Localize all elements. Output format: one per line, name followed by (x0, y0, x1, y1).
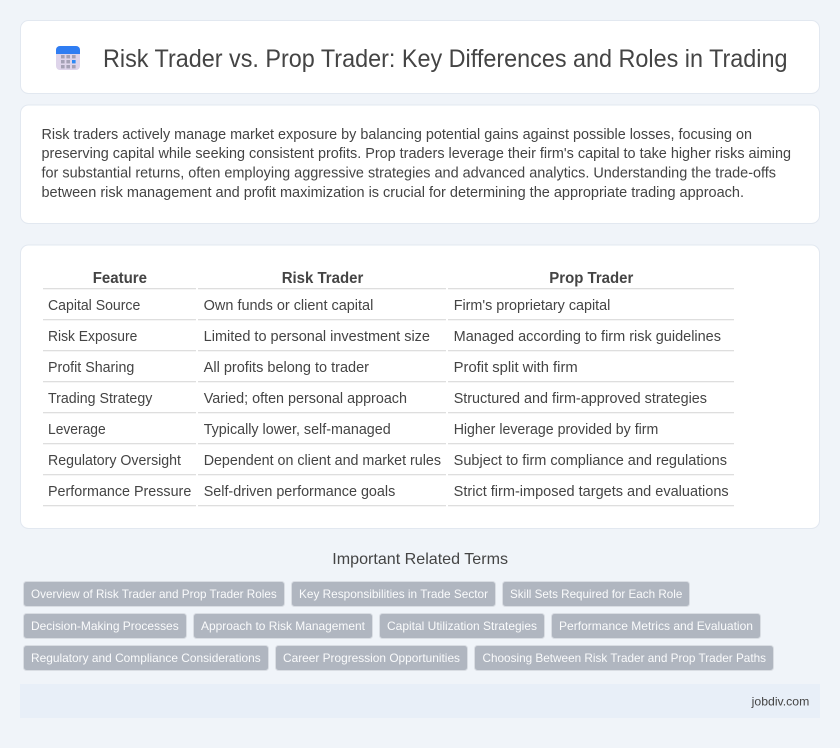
intro paragraph: preserving capital while seeking consistent profits. Prop traders leverage their firm's capital to take higher risks aiming (42, 146, 791, 162)
footer source link: jobdiv.com (751, 694, 809, 708)
table header row (43, 270, 734, 289)
related terms tags (24, 582, 774, 670)
row: profit sharing: Profit split with firm (454, 360, 578, 376)
row: risk exposure (43, 329, 734, 351)
row: capital source (43, 298, 734, 320)
panel: header (20, 20, 820, 94)
panel: introduction (20, 105, 820, 224)
tag (292, 582, 496, 606)
row: capital source: Firm's proprietary capital (454, 298, 610, 314)
row: profit sharing: Profit Sharing (48, 360, 134, 376)
row: regulatory oversight: Subject to firm compliance and regulations (454, 453, 727, 469)
table header row: Risk Trader (282, 270, 363, 287)
intro paragraph: Risk traders actively manage market exposure by balancing potential gains against possible losses, focusing on (42, 127, 752, 143)
row: risk exposure: Managed according to firm risk guidelines (454, 329, 721, 345)
intro paragraph: between risk management and profit maximization is crucial for determining the appropriate trading approach. (42, 185, 744, 201)
tag (552, 614, 760, 638)
row: trading strategy: Varied; often personal approach (204, 391, 407, 407)
tag (276, 646, 468, 670)
title: Risk Trader vs. Prop Trader: Key Differences and Roles in Trading (103, 45, 788, 73)
tag: Performance Metrics and Evaluation (559, 619, 753, 633)
table header row: Feature (93, 270, 147, 287)
tag: Decision-Making Processes (31, 619, 179, 633)
row: profit sharing (43, 360, 734, 382)
row: risk exposure: Risk Exposure (48, 329, 137, 345)
tag (194, 614, 372, 638)
table header row: Prop Trader (549, 270, 633, 287)
tag: Approach to Risk Management (201, 619, 366, 633)
tag: Career Progression Opportunities (283, 651, 460, 665)
row: profit sharing: All profits belong to trader (204, 360, 369, 376)
row: trading strategy: Structured and firm-approved strategies (454, 391, 707, 407)
row: regulatory oversight: Dependent on client and market rules (204, 453, 441, 469)
row: capital source: Own funds or client capital (204, 298, 373, 314)
tag (24, 646, 268, 670)
tag: Regulatory and Compliance Considerations (31, 651, 261, 665)
row: trading strategy: Trading Strategy (48, 391, 153, 407)
heading: important related terms: Important Related Terms (332, 551, 508, 568)
tag (24, 614, 186, 638)
row: leverage: Leverage (48, 422, 106, 438)
row: regulatory oversight (43, 453, 734, 475)
row: performance pressure: Self-driven performance goals (204, 484, 395, 500)
tag: Overview of Risk Trader and Prop Trader Roles (31, 587, 277, 601)
row: performance pressure: Strict firm-imposed targets and evaluations (454, 484, 729, 500)
row: trading strategy (43, 391, 734, 413)
row: capital source: Capital Source (48, 298, 140, 314)
footer (20, 684, 820, 718)
tag (380, 614, 544, 638)
tag (502, 582, 690, 606)
tag: Choosing Between Risk Trader and Prop Trader Paths (482, 651, 766, 665)
tag: Skill Sets Required for Each Role (510, 587, 683, 601)
tag (474, 646, 774, 670)
row: performance pressure: Performance Pressure (48, 484, 191, 500)
row: performance pressure (43, 484, 734, 506)
row: leverage (43, 422, 734, 444)
tag: Key Responsibilities in Trade Sector (299, 587, 488, 601)
intro paragraph: for substantial returns, often employing aggressive strategies and advanced analytics. Understanding the trade-offs (42, 166, 776, 182)
tag: Capital Utilization Strategies (387, 619, 537, 633)
icon: calendar (56, 46, 80, 70)
row: risk exposure: Limited to personal investment size (204, 329, 430, 345)
tag (24, 582, 284, 606)
row: regulatory oversight: Regulatory Oversight (48, 453, 181, 469)
row: leverage: Typically lower, self-managed (204, 422, 391, 438)
row: leverage: Higher leverage provided by firm (454, 422, 658, 438)
panel: comparison table (20, 245, 820, 528)
intro paragraph (42, 127, 791, 201)
